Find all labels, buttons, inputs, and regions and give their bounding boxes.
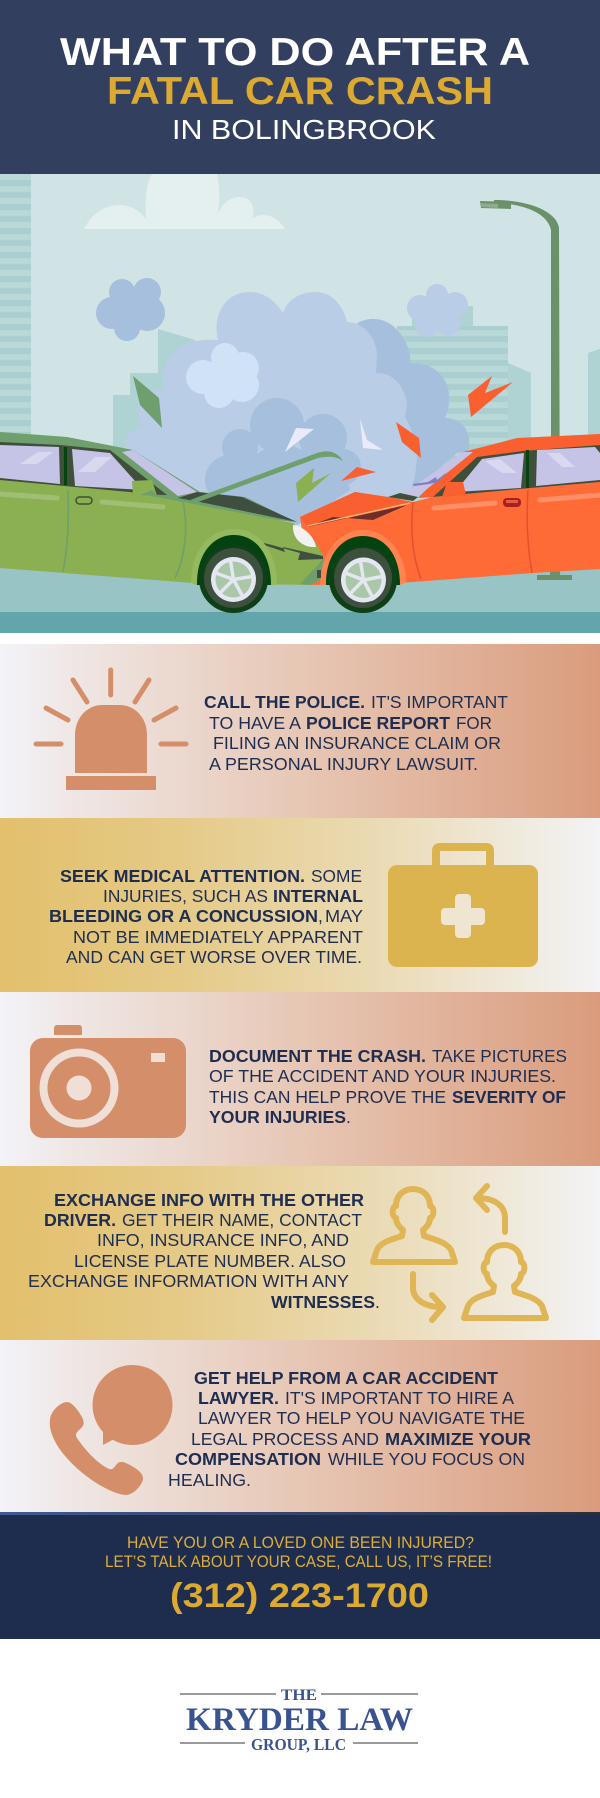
text: exchange info: LICENSE PLATE NUMBER. ALSO <box>74 1251 346 1271</box>
title line 2: FATAL CAR CRASH <box>107 70 493 113</box>
pale cloud <box>186 343 259 408</box>
icon: first aid kit <box>388 843 538 967</box>
icon: siren <box>36 670 186 790</box>
panel: call the police <box>0 644 600 818</box>
text: call the police: A PERSONAL INJURY LAWSUIT. <box>209 754 478 774</box>
smoke <box>96 278 469 525</box>
call to action band: LET’S TALK ABOUT YOUR CASE, CALL US, IT’S FREE! <box>105 1553 492 1571</box>
text: document the crash <box>209 1046 567 1127</box>
text: document the crash: THIS CAN HELP PROVE THE <box>209 1087 446 1107</box>
text: document the crash: DOCUMENT THE CRASH. <box>209 1046 426 1066</box>
text: get help: GET HELP FROM A CAR ACCIDENT <box>194 1368 498 1388</box>
phone number: (312) 223-1700 <box>170 1577 429 1615</box>
left wheel <box>197 535 271 613</box>
small smoke puff left <box>96 278 165 341</box>
text: exchange info: EXCHANGE INFORMATION WITH ANY <box>28 1271 349 1291</box>
text: get help: WHILE YOU FOCUS ON <box>328 1449 525 1469</box>
text: exchange info: DRIVER. <box>44 1210 116 1230</box>
text: seek medical attention: BLEEDING OR A CONCUSSION <box>49 906 318 926</box>
right wheel <box>326 536 400 613</box>
text: get help: COMPENSATION <box>175 1449 321 1469</box>
small smoke puff right <box>407 284 468 337</box>
text: get help: LAWYER. <box>198 1388 279 1408</box>
text: document the crash: YOUR INJURIES <box>209 1107 346 1127</box>
panel: document the crash <box>0 992 600 1166</box>
main smoke <box>120 292 417 510</box>
text: exchange info: GET THEIR NAME, CONTACT <box>122 1210 362 1230</box>
text: seek medical attention: INTERNAL <box>273 886 363 906</box>
darker front cloud <box>205 398 361 525</box>
text: document the crash: . <box>346 1107 351 1127</box>
text: get help: HEALING. <box>168 1470 251 1490</box>
panel: exchange info <box>0 1166 600 1340</box>
header band <box>0 0 600 174</box>
text: exchange info: EXCHANGE INFO WITH THE OTHER <box>54 1190 364 1210</box>
text: seek medical attention: SOME <box>311 866 362 886</box>
text: seek medical attention: , <box>318 906 323 926</box>
text: call the police: CALL THE POLICE. <box>204 692 365 712</box>
panel: seek medical attention <box>0 818 600 992</box>
road <box>0 560 600 633</box>
text: call the police: TO HAVE A <box>209 713 301 733</box>
text: exchange info: . <box>375 1292 380 1312</box>
icon: camera <box>30 1025 186 1138</box>
text: get help: LAWYER TO HELP YOU NAVIGATE THE <box>198 1408 525 1428</box>
text: call the police: FOR <box>456 713 492 733</box>
background buildings <box>0 174 600 574</box>
debris shards <box>133 376 513 502</box>
orange car <box>300 434 600 585</box>
text: exchange info: WITNESSES <box>271 1292 375 1312</box>
text: call the police: IT'S IMPORTANT <box>371 692 508 712</box>
logo: THE <box>281 1687 317 1704</box>
cloud <box>84 174 285 229</box>
crash illustration <box>0 174 600 633</box>
text: seek medical attention: INJURIES, SUCH AS <box>103 886 268 906</box>
call to action text: HAVE YOU OR A LOVED ONE BEEN INJURED? <box>127 1534 474 1552</box>
logo <box>180 1687 418 1754</box>
text: seek medical attention: MAY <box>325 906 363 926</box>
text: get help: IT'S IMPORTANT TO HIRE A <box>285 1388 514 1408</box>
text: call the police <box>204 692 508 774</box>
text: call the police: FILING AN INSURANCE CLAIM OR <box>213 733 501 753</box>
text: seek medical attention: SEEK MEDICAL ATTENTION. <box>60 866 305 886</box>
icon: two people with arrows <box>373 1186 546 1320</box>
logo: KRYDER LAW <box>186 1702 413 1738</box>
text: exchange info: INFO, INSURANCE INFO, AND <box>97 1230 349 1250</box>
street lamp <box>480 200 560 575</box>
back smoke <box>340 319 469 500</box>
title line 1: WHAT TO DO AFTER A <box>60 31 530 74</box>
green car <box>0 432 343 585</box>
text: get help: LEGAL PROCESS AND <box>191 1429 379 1449</box>
text: seek medical attention: AND CAN GET WORSE OVER TIME. <box>66 947 362 967</box>
text: call the police: POLICE REPORT <box>306 713 450 733</box>
text: seek medical attention: NOT BE IMMEDIATELY APPARENT <box>73 927 363 947</box>
panel: get help <box>0 1340 600 1512</box>
icon: phone with speech bubble <box>50 1365 172 1495</box>
text: exchange info <box>28 1190 380 1312</box>
text: get help: MAXIMIZE YOUR <box>385 1429 531 1449</box>
logo: GROUP, LLC <box>251 1735 346 1754</box>
text: get help <box>168 1368 531 1490</box>
text: document the crash: SEVERITY OF <box>452 1087 566 1107</box>
text: document the crash: OF THE ACCIDENT AND YOUR INJURIES. <box>209 1066 556 1086</box>
call to action band <box>0 1512 600 1639</box>
text: document the crash: TAKE PICTURES <box>432 1046 567 1066</box>
title line 3: IN BOLINGBROOK <box>172 114 437 145</box>
text: seek medical attention <box>49 866 363 967</box>
